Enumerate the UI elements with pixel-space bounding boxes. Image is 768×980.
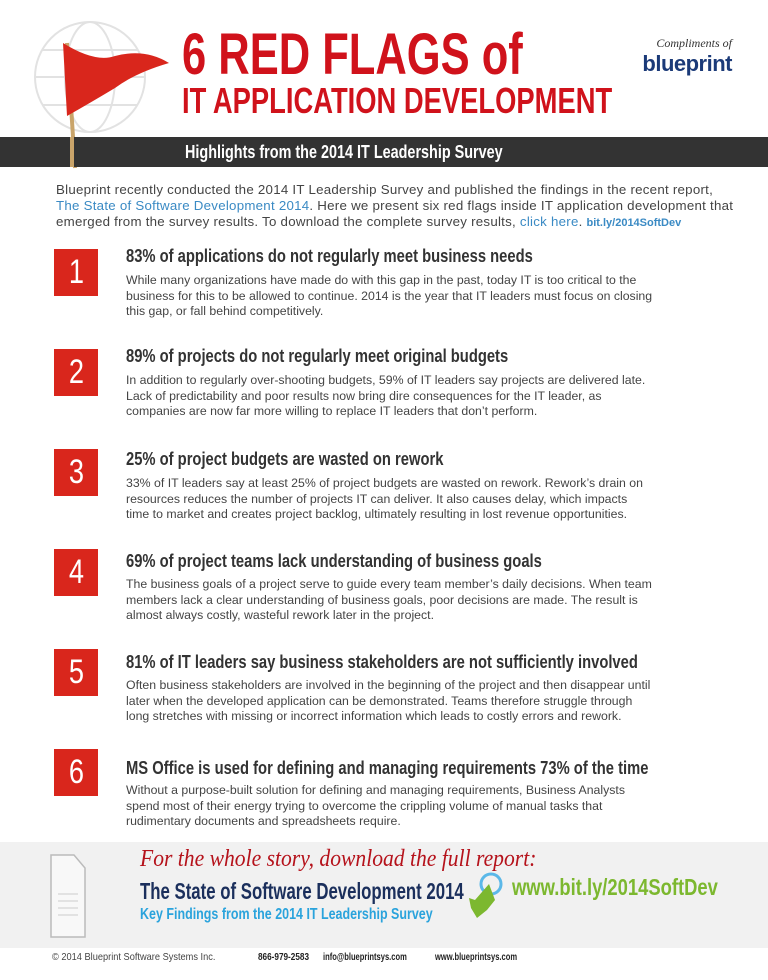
item 3: resources reduces the number of projects IT can deliver. It also causes delay, which impacts	[126, 492, 627, 506]
item 2: companies are now far more willing to replace IT leaders that don’t perform.	[126, 404, 537, 418]
icon: red flag	[63, 42, 169, 168]
item 5: 5	[68, 653, 84, 691]
item 3: 25% of project budgets are wasted on rework	[126, 449, 443, 469]
item 6	[54, 749, 648, 828]
item 2: Lack of predictability and poor results now bring dire consequences for the IT leader, as	[126, 388, 602, 402]
item 2: In addition to regularly over-shooting budgets, 59% of IT leaders say projects are delivered late.	[126, 373, 645, 387]
report subtitle: Key Findings from the 2014 IT Leadership Survey	[140, 906, 433, 923]
item 3: 33% of IT leaders say at least 25% of project budgets are wasted on rework. Rework’s drain on	[126, 476, 643, 490]
icon: pointing hand	[469, 872, 502, 918]
item 1: 83% of applications do not regularly meet business needs	[126, 246, 533, 266]
item 5	[54, 649, 650, 723]
item 6: spend most of their energy trying to overcome the crippling volume of manual tasks that	[126, 798, 602, 812]
item 4: members lack a clear understanding of business goals, poor decisions are made. The result is	[126, 592, 638, 606]
logo: blueprint: Compliments of	[656, 36, 732, 50]
title	[182, 22, 612, 121]
item 2: 2	[68, 353, 84, 391]
item 3: 3	[68, 453, 84, 491]
item 6: rudimentary documents and spreadsheets require.	[126, 814, 401, 828]
report title: The State of Software Development 2014	[140, 878, 464, 904]
item 1: 1	[68, 253, 84, 291]
title: 6 RED FLAGS of	[182, 22, 523, 87]
subtitle bar: Highlights from the 2014 IT Leadership Survey	[185, 142, 503, 162]
item 1: business for this to be allowed to continue. 2014 is the year that IT leaders must focus on closing	[126, 288, 652, 302]
item 1: this gap, or fall behind competitively.	[126, 304, 323, 318]
intro text: Blueprint recently conducted the 2014 IT Leadership Survey and published the findings in the recent report,	[56, 182, 713, 197]
item 3	[54, 449, 643, 521]
item 1: While many organizations have made do with this gap in the past, today IT is too critical to the	[126, 273, 636, 287]
icon: globe	[34, 21, 146, 133]
footer contact: info@blueprintsys.com	[323, 951, 407, 963]
intro text	[56, 182, 733, 229]
logo: blueprint	[642, 36, 734, 76]
title: IT APPLICATION DEVELOPMENT	[182, 80, 612, 121]
footer panel: download	[0, 842, 768, 948]
item 5: Often business stakeholders are involved in the beginning of the project and then disappear until	[126, 678, 650, 692]
item 4	[54, 549, 652, 622]
icon: document	[50, 854, 86, 938]
item 5: later when the developed application can be demonstrated. Teams therefore struggle through	[126, 694, 632, 708]
item 2: 89% of projects do not regularly meet original budgets	[126, 346, 508, 366]
subtitle bar	[0, 137, 768, 167]
item 6: 6	[68, 753, 84, 791]
item 4: The business goals of a project serve to guide every team member’s daily decisions. When team	[126, 577, 652, 591]
url: www.bit.ly/2014SoftDev	[512, 874, 718, 900]
item 1	[54, 246, 652, 318]
item 5: long stretches with missing or incorrect information which leads to costly errors and rework.	[126, 709, 621, 723]
intro text: The State of Software Development 2014. Here we present six red flags inside IT application development that	[56, 198, 733, 213]
item 6: Without a purpose-built solution for defining and managing requirements, Business Analysts	[126, 783, 625, 797]
footer contact: 866-979-2583	[258, 951, 309, 963]
item 2	[54, 346, 645, 418]
item 4: 4	[68, 553, 84, 591]
item 4: almost always costly, wasteful rework later in the project.	[126, 608, 434, 622]
logo: blueprint: blueprint	[642, 51, 732, 76]
footer contact: © 2014 Blueprint Software Systems Inc.	[52, 951, 215, 963]
footer contact	[52, 951, 517, 963]
item 4: 69% of project teams lack understanding of business goals	[126, 551, 542, 571]
script heading: For the whole story, download the full report:	[140, 846, 536, 872]
intro text: emerged from the survey results. To download the complete survey results, click here. bit.ly/2014SoftDev	[56, 214, 681, 229]
item 3: time to market and creates project backlog, ultimately resulting in lost revenue opportunities.	[126, 507, 627, 521]
flag pole over bar	[70, 137, 74, 167]
item 5: 81% of IT leaders say business stakeholders are not sufficiently involved	[126, 652, 638, 672]
item 6: MS Office is used for defining and managing requirements 73% of the time	[126, 758, 648, 778]
footer contact: www.blueprintsys.com	[435, 951, 517, 963]
